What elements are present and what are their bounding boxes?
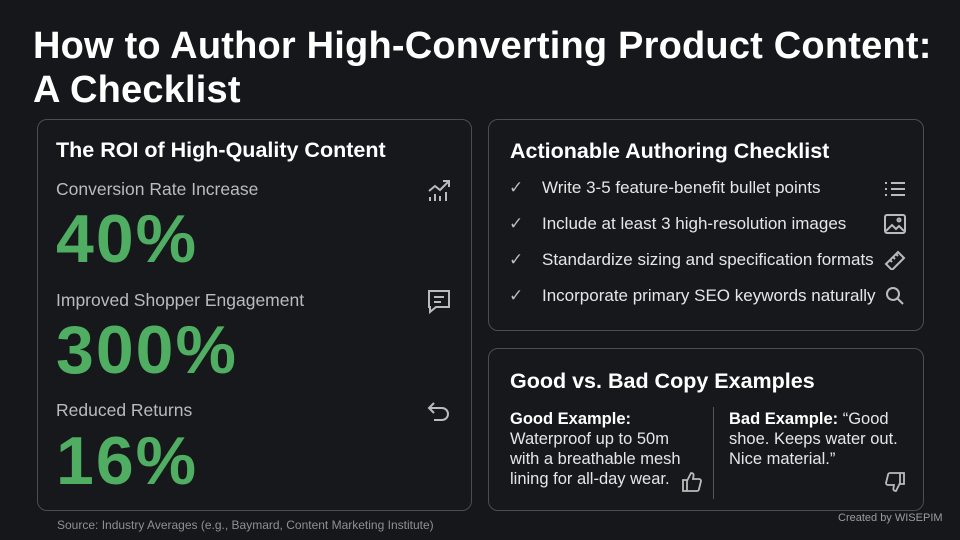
item 1: Write 3-5 feature-benefit bullet points (542, 178, 820, 197)
panel: ROI (37, 119, 472, 511)
heading: checklist: Actionable Authoring Checklist (510, 139, 829, 163)
item 3: Standardize sizing and specification formats (542, 250, 874, 269)
item 1: ✓ (509, 178, 523, 197)
item 4: Incorporate primary SEO keywords naturally (542, 286, 876, 305)
stat: returns label: Reduced Returns (56, 400, 192, 420)
source note: Source: Industry Averages (e.g., Baymard, Content Marketing Institute) (57, 518, 434, 532)
checklist items (509, 178, 876, 305)
item 4: ✓ (509, 286, 523, 305)
icon: thumbs up (682, 472, 702, 492)
panel: checklist (488, 119, 924, 331)
icon: chart (428, 180, 450, 201)
stat: 40%: 40% (56, 201, 198, 277)
credit: Created by WISEPIM (838, 512, 943, 524)
title (33, 25, 932, 111)
icon: image (884, 214, 906, 234)
heading: ROI: The ROI of High-Quality Content (56, 138, 386, 162)
item 2: Include at least 3 high-resolution images (542, 214, 846, 233)
icon: thumbs down (885, 472, 905, 492)
good example: Good Example: (510, 410, 631, 428)
stat: conversion label: Conversion Rate Increase (56, 179, 258, 199)
panel: good vs bad (488, 348, 924, 511)
stat: 300%: 300% (56, 312, 238, 388)
heading: good vs bad: Good vs. Bad Copy Examples (510, 369, 815, 393)
stat: engagement label: Improved Shopper Engagement (56, 290, 304, 310)
divider (713, 407, 714, 499)
icon: chat (428, 290, 450, 314)
icon: list (885, 182, 905, 196)
good example: Waterproof up to 50m with a breathable mesh lining for all-day wear. (510, 430, 681, 488)
stat: 16%: 16% (56, 423, 198, 499)
item 3: ✓ (509, 250, 523, 269)
item 2: ✓ (509, 214, 523, 233)
icon: ruler (884, 250, 906, 270)
icon: undo (428, 402, 449, 421)
icon: search (886, 287, 904, 305)
title: A Checklist (33, 69, 241, 111)
title: How to Author High-Converting Product Content: (33, 25, 932, 67)
bad example: Bad Example: “Good shoe. Keeps water out. Nice material.” (729, 410, 898, 468)
